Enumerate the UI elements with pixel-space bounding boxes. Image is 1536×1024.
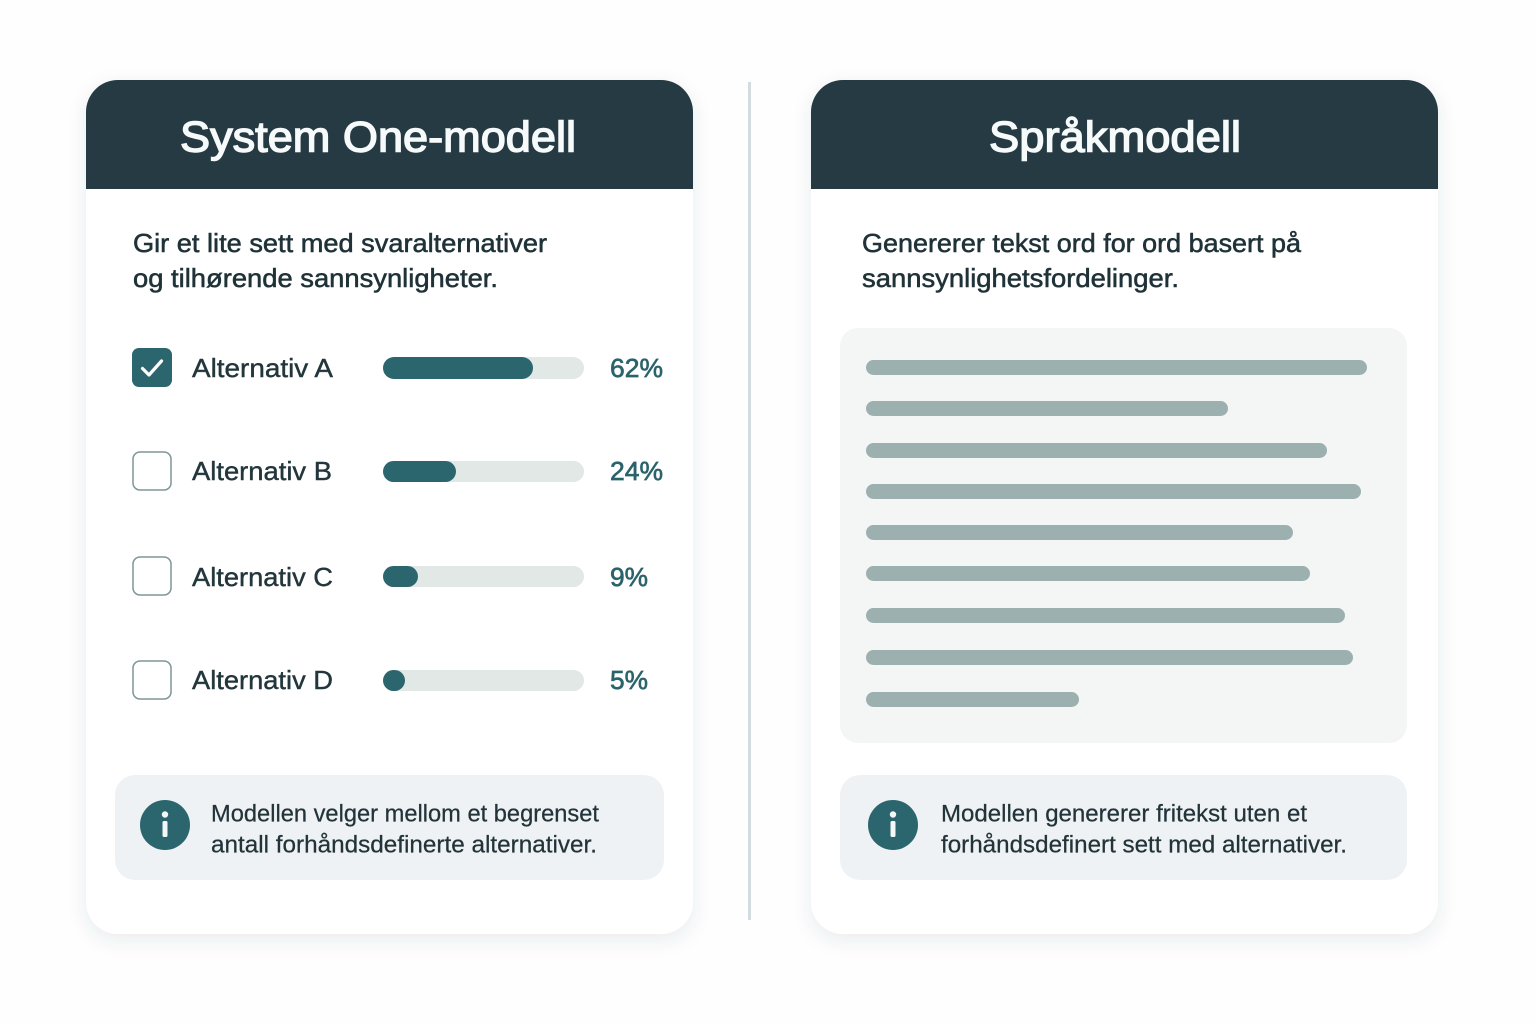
callout text	[941, 800, 1347, 858]
description: right: Genererer tekst ord for ord basert på	[862, 228, 1302, 258]
description: left	[133, 228, 547, 293]
card background: left	[86, 80, 693, 934]
option: Alternativ C	[133, 557, 648, 595]
label: Alternativ A	[192, 353, 334, 383]
label: Alternativ D	[192, 665, 333, 695]
callout text: forhåndsdefinert sett med alternativer.	[941, 832, 1347, 858]
callout text: antall forhåndsdefinerte alternativer.	[211, 832, 597, 858]
description: right	[862, 228, 1302, 293]
heading: System One-modell: System One-modell	[180, 114, 576, 162]
icon: checked box	[132, 348, 172, 387]
text placeholder panel	[840, 328, 1407, 743]
option: Alternativ A	[132, 348, 663, 387]
panel: System One-modell	[86, 80, 693, 934]
bar: 24%	[383, 461, 584, 482]
value: 24%	[610, 456, 663, 486]
icon: empty box	[133, 661, 171, 699]
callout text	[211, 800, 599, 858]
bar: 62%	[383, 357, 584, 379]
value: 62%	[610, 353, 663, 383]
panel: Språkmodell	[811, 80, 1438, 934]
heading: Språkmodell: Språkmodell	[989, 114, 1241, 162]
option: Alternativ D	[133, 661, 648, 699]
card background: right	[811, 80, 1438, 934]
icon: info	[140, 800, 190, 850]
value: 5%	[610, 665, 648, 695]
callout text: Modellen velger mellom et begrenset	[211, 800, 599, 828]
option: Alternativ B	[133, 452, 663, 490]
callout text: Modellen genererer fritekst uten et	[941, 800, 1307, 828]
callout: left	[115, 775, 664, 880]
bar: 5%	[383, 670, 584, 691]
icon: empty box	[133, 452, 171, 490]
description: left: Gir et lite sett med svaralternativer	[133, 228, 547, 258]
header bar: right	[811, 80, 1438, 189]
description: left: og tilhørende sannsynligheter.	[133, 263, 498, 293]
label: Alternativ B	[192, 456, 332, 486]
label: Alternativ C	[192, 562, 333, 592]
icon: empty box	[133, 557, 171, 595]
divider	[748, 82, 751, 920]
header bar: left	[86, 80, 693, 189]
bar: 9%	[383, 566, 584, 587]
description: right: sannsynlighetsfordelinger.	[862, 263, 1179, 293]
value: 9%	[610, 562, 648, 592]
callout: right	[840, 775, 1407, 880]
icon: info	[868, 800, 918, 850]
